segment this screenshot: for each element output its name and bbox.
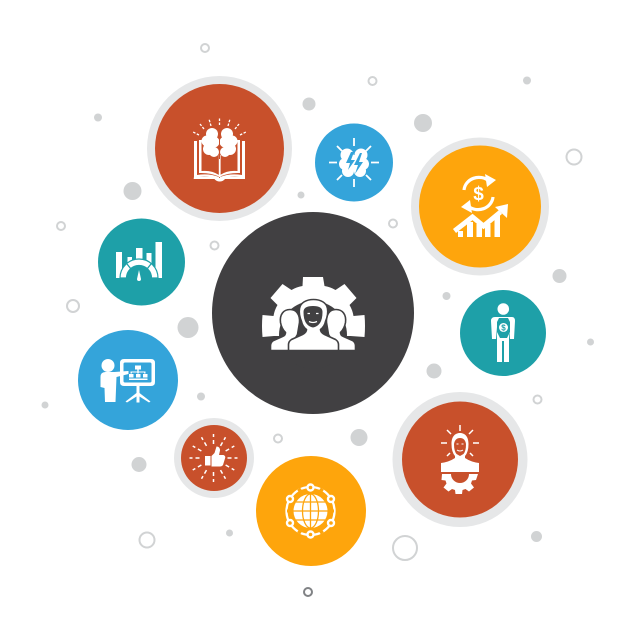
panel: global network [256,456,366,566]
icon: brain with lightning [329,138,379,187]
panel: centre team gear [212,212,414,414]
scattered grey dots [42,76,594,542]
centre team member [288,300,338,350]
panel: thumbs up [174,418,254,498]
icon: brain over open book [193,117,246,182]
panel: idea head and gear [392,392,528,527]
icon: team inside gear [262,277,365,369]
panel: brain energy [315,124,393,202]
panel: brain and book [147,76,292,221]
panel: employee salary [460,290,546,376]
left team member [270,310,300,350]
icon: presenter at board [100,359,155,402]
icon: thinking person over gear [441,425,479,494]
icon: bars with gauge [116,242,162,281]
panel: gauge chart [98,218,185,306]
gear [262,277,365,337]
icon: thumbs up with rays [190,434,238,482]
panel: presenter [78,330,178,430]
panel: money growth [411,138,549,276]
icon: person with dollar: $ [501,324,506,332]
right team member [326,310,356,350]
icon: globe with nodes [286,484,334,538]
gear hole [279,301,347,369]
icon: dollar cycle and growth chart: $ [473,184,484,205]
scattered ring dots [57,44,582,596]
